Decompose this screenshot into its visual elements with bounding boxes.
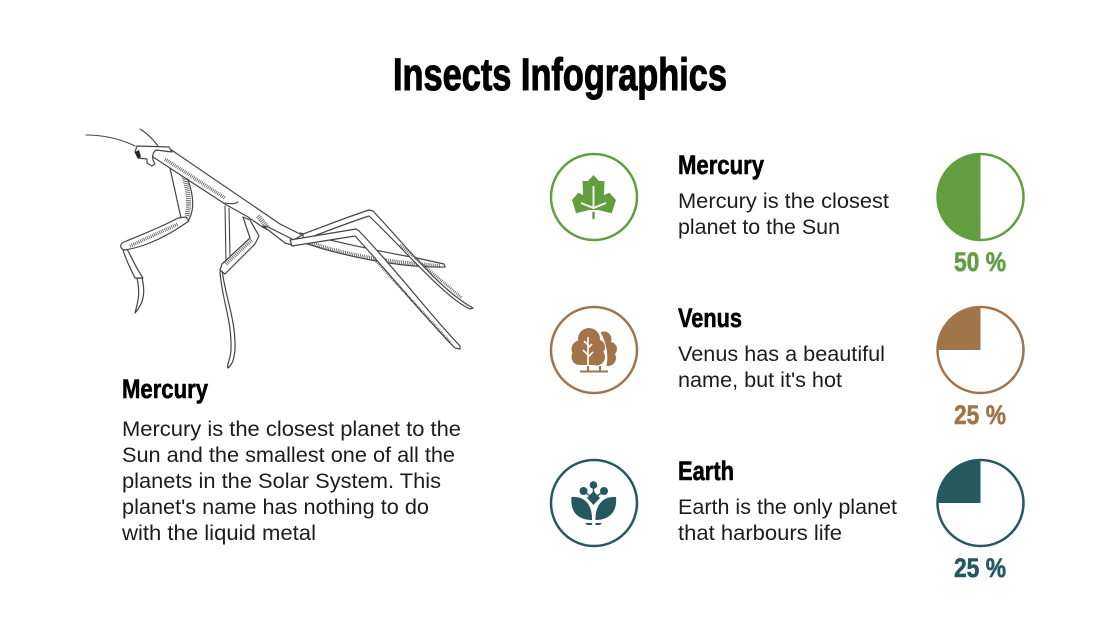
pie chart: 50 % [938,154,1024,240]
text: Earth: Earth is the only planet [678,496,897,519]
icon: lotus flower [551,460,637,546]
left text block: planet's name has nothing to do [122,496,429,519]
text: Venus: Venus has a beautiful [678,343,885,366]
left text block: Mercury is the closest planet to the [122,418,461,441]
icon: maple leaf [551,154,637,240]
left text block [121,418,461,545]
icon: trees [551,307,637,393]
left text block: with the liquid metal [121,522,316,545]
illustration: praying mantis [86,129,473,368]
text: Venus: name, but it's hot [678,369,842,392]
text: Mercury: planet to the Sun [678,216,840,239]
value: 25 % brown: 25 % [954,400,1006,430]
text: Mercury: Mercury is the closest [678,190,889,213]
pie chart: 25 % brown [938,307,1024,393]
left heading: Mercury [122,374,208,404]
value: 50 %: 50 % [954,247,1006,277]
pie chart: 25 % teal [938,460,1024,546]
title: Insects Infographics [393,49,727,100]
text: Mercury [678,190,889,239]
value: 25 % teal: 25 % [954,553,1006,583]
left text block: Sun and the smallest one of all the [122,444,455,467]
text: Venus [678,343,885,392]
text: Earth: that harbours life [678,522,842,545]
heading: Venus: Venus [678,303,742,333]
heading: Earth: Earth [678,456,734,486]
heading: Mercury: Mercury [678,150,764,180]
text: Earth [678,496,897,545]
left text block: planets in the Solar System. This [122,470,441,493]
